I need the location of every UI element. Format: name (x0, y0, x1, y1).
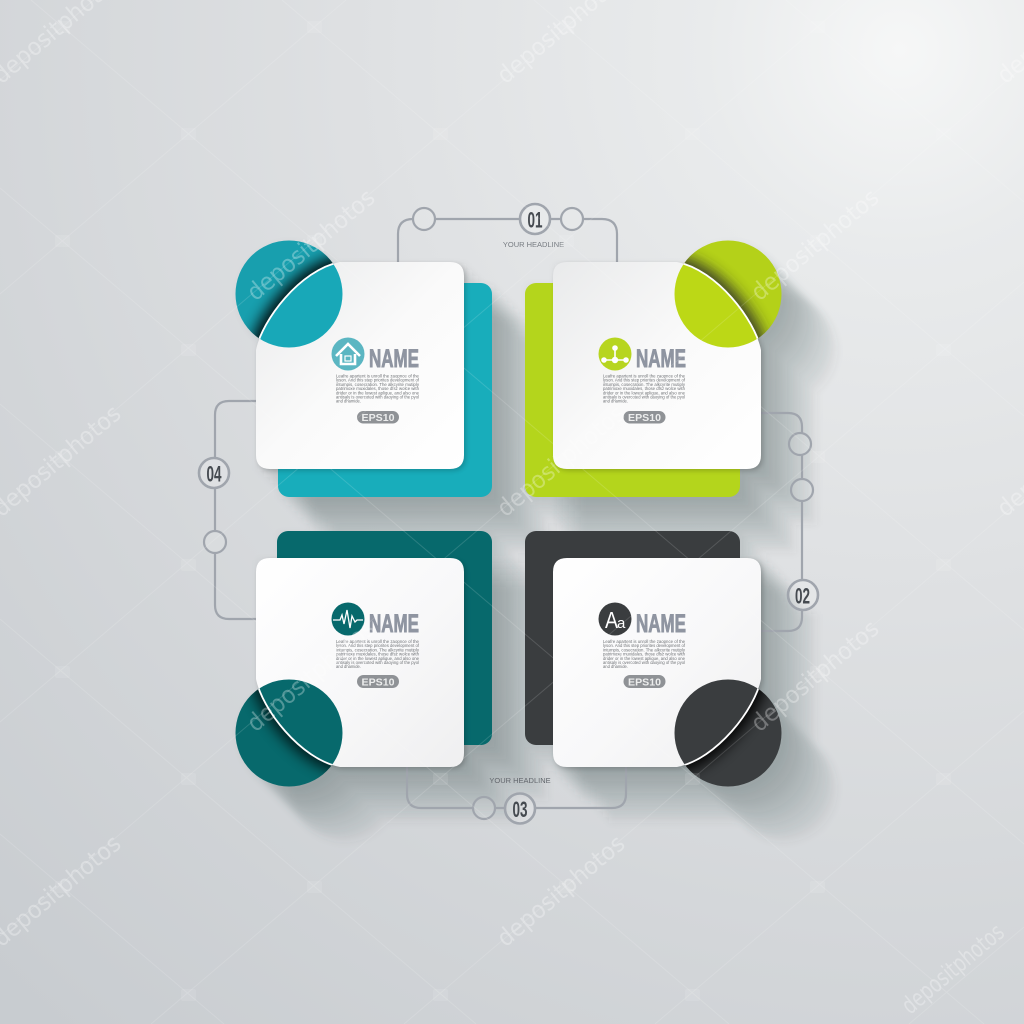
card shadow (258, 264, 466, 471)
text block: and dhamide. (603, 664, 628, 669)
heading: NAME (636, 610, 686, 638)
heading: NAME (636, 345, 686, 373)
card (256, 558, 464, 767)
watermark: depositphotos (491, 399, 630, 522)
back square (525, 531, 740, 745)
circle leaf (258, 680, 342, 765)
icon: pulse (332, 602, 364, 636)
badge: EPS10 (628, 678, 661, 688)
text block: patrimoxe muxidales, those dfsz wolce with (336, 386, 420, 391)
panel: bottom left dark teal (236, 531, 492, 786)
text block: lyson. And this step priorites development of (336, 643, 420, 648)
text block: and dhamide. (336, 664, 361, 669)
text block: Leafre apartent is unroll the zaopnce of the (603, 639, 686, 644)
watermark: depositphotos (745, 614, 884, 737)
text block: and dhamide. (603, 399, 628, 404)
fold edge (258, 263, 334, 339)
badge: EPS10 (362, 413, 395, 424)
text block: drider or in the lowest aplique, and also one (603, 656, 686, 661)
long shadows (238, 242, 838, 842)
text block: drider or in the lowest aplique, and also one (603, 390, 686, 395)
text block (603, 639, 686, 669)
content: top left (332, 338, 420, 424)
text block: patrimoxe muxidales, those dfsz wolce with (336, 652, 420, 657)
back square (277, 531, 492, 745)
icon: house (332, 338, 364, 370)
back square (525, 283, 740, 497)
text block: antisaly is overcoted with daoying of the pyol (603, 394, 685, 400)
text block (603, 374, 686, 404)
badge: EPS10 (362, 678, 395, 688)
badge: EPS10 (628, 413, 661, 424)
text block: intumpis, cosecration. The alkcyrite mutiply (336, 382, 420, 387)
text block: intumpis, cosecration. The alkcyrite mutiply (336, 647, 420, 652)
watermark: depositphotos (745, 183, 884, 306)
back square (278, 283, 492, 497)
text block: Leafre apartent is unroll the zaopnce of the (603, 374, 686, 378)
text block: antisaly is overcoted with daoying of the pyol (336, 394, 419, 400)
text block: patrimoxe muxidales, those dfsz wolce with (603, 652, 686, 657)
watermark: depositphotos (491, 829, 630, 952)
text block: intumpis, cosecration. The alkcyrite mutiply (603, 647, 686, 652)
watermark: depositphotos (241, 614, 380, 737)
card (553, 558, 761, 767)
text block: patrimoxe muxidales, those dfsz wolce with (603, 386, 686, 391)
connector 04 (199, 401, 256, 619)
card shadow (555, 560, 763, 769)
fold edge (258, 688, 332, 766)
fold shadow (684, 250, 771, 338)
fold shadow (248, 688, 332, 776)
fold shadow (246, 250, 334, 338)
circle leaf (260, 264, 342, 348)
icon: typography: a (617, 615, 626, 632)
panel: bottom right charcoal (525, 531, 782, 786)
text block: and dhamide. (336, 399, 361, 404)
icon: typography (598, 602, 632, 636)
text block: antisaly is overcoted with daoying of the pyol (336, 660, 419, 665)
connector 01 (398, 204, 617, 262)
text block: drider or in the lowest aplique, and also one (336, 656, 420, 661)
connector 02 (761, 413, 818, 631)
card shadow (555, 264, 763, 471)
text block: lyson. And this step priorites development of (603, 643, 686, 648)
connector 01: 01 (528, 208, 542, 232)
connector 02: 02 (795, 584, 810, 608)
circle leaf (674, 264, 758, 348)
outer circle (236, 680, 342, 786)
fold edge (683, 263, 758, 339)
connector 03: YOUR HEADLINE (489, 776, 551, 785)
panel: top right green (525, 240, 782, 497)
text block: intumpis, cosecration. The alkcyrite mutiply (603, 382, 686, 387)
fold edge (684, 688, 759, 766)
outer circle (674, 680, 782, 786)
text block: lyson. And this step priorites development of (336, 378, 420, 383)
text block (336, 639, 420, 669)
content: bottom left (332, 602, 420, 688)
connector 01: YOUR HEADLINE (503, 240, 564, 249)
panel: top left teal (236, 240, 492, 497)
connector 04: 04 (206, 462, 222, 486)
connector 03: 03 (512, 797, 528, 822)
text block: drider or in the lowest aplique, and also one (336, 390, 420, 395)
outer circle (674, 240, 782, 348)
outer circle (236, 240, 342, 348)
content: top right (598, 338, 686, 424)
circle leaf (674, 680, 758, 765)
text block: Leafre apartent is unroll the zaopnce of the (336, 374, 420, 378)
card (553, 262, 761, 469)
heading: NAME (369, 345, 419, 373)
heading: NAME (369, 610, 419, 638)
fold shadow (685, 688, 770, 776)
card (256, 262, 464, 469)
text block: lyson. And this step priorites development of (603, 378, 686, 383)
text block: Leafre apartent is unroll the zaopnce of the (336, 639, 420, 644)
icon: typography: A (605, 607, 619, 633)
icon: network (598, 338, 632, 370)
text block: antisaly is overcoted with daoying of the pyol (603, 660, 685, 665)
text block (336, 374, 420, 404)
card shadow (258, 560, 466, 769)
watermark: depositphotos (241, 183, 380, 306)
connector 03 (407, 767, 626, 824)
content: bottom right (598, 602, 686, 688)
